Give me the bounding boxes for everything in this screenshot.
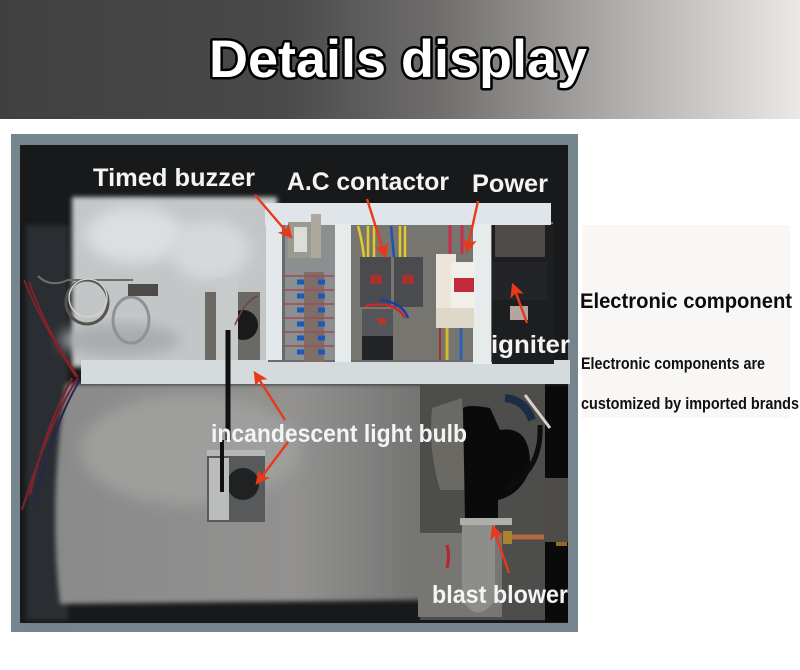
circuit breakers [436,225,475,360]
label: power: Power [472,170,548,198]
text block: description [581,355,799,413]
label: blast blower: blast blower [432,581,568,609]
timer buzzer [288,214,321,258]
igniter box [492,225,547,320]
heading: electronic component: Electronic component [580,290,792,313]
blower unit [418,395,567,617]
side panel background [582,225,790,418]
terminal block [284,272,334,362]
upper galvanized back plate [60,197,277,367]
label: A.C contactor: A.C contactor [287,168,449,196]
arrows [255,195,527,573]
right louvre [544,478,568,542]
right dark recess [545,386,568,622]
labels on photo [93,164,570,609]
label: igniter: igniter [491,331,570,359]
lower galvanized back plate [55,384,460,604]
coiled sensor wire [22,276,158,510]
rear plate behind blower [420,384,545,620]
header banner [0,0,800,119]
horizontal rail [81,360,570,384]
label: timed buzzer: Timed buzzer [93,164,255,192]
panel: control box photo [11,134,799,632]
title: Details display [209,30,588,89]
frame posts [266,222,282,360]
lower lamp bracket [207,440,265,522]
text block: description: Electronic components are [581,355,765,373]
label: incandescent light bulb: incandescent light bulb [211,420,467,448]
electrical cabinet [265,203,568,617]
top frame [265,203,551,225]
left wall [26,225,68,620]
upper lamp bracket [205,278,260,440]
contactors [358,226,423,360]
